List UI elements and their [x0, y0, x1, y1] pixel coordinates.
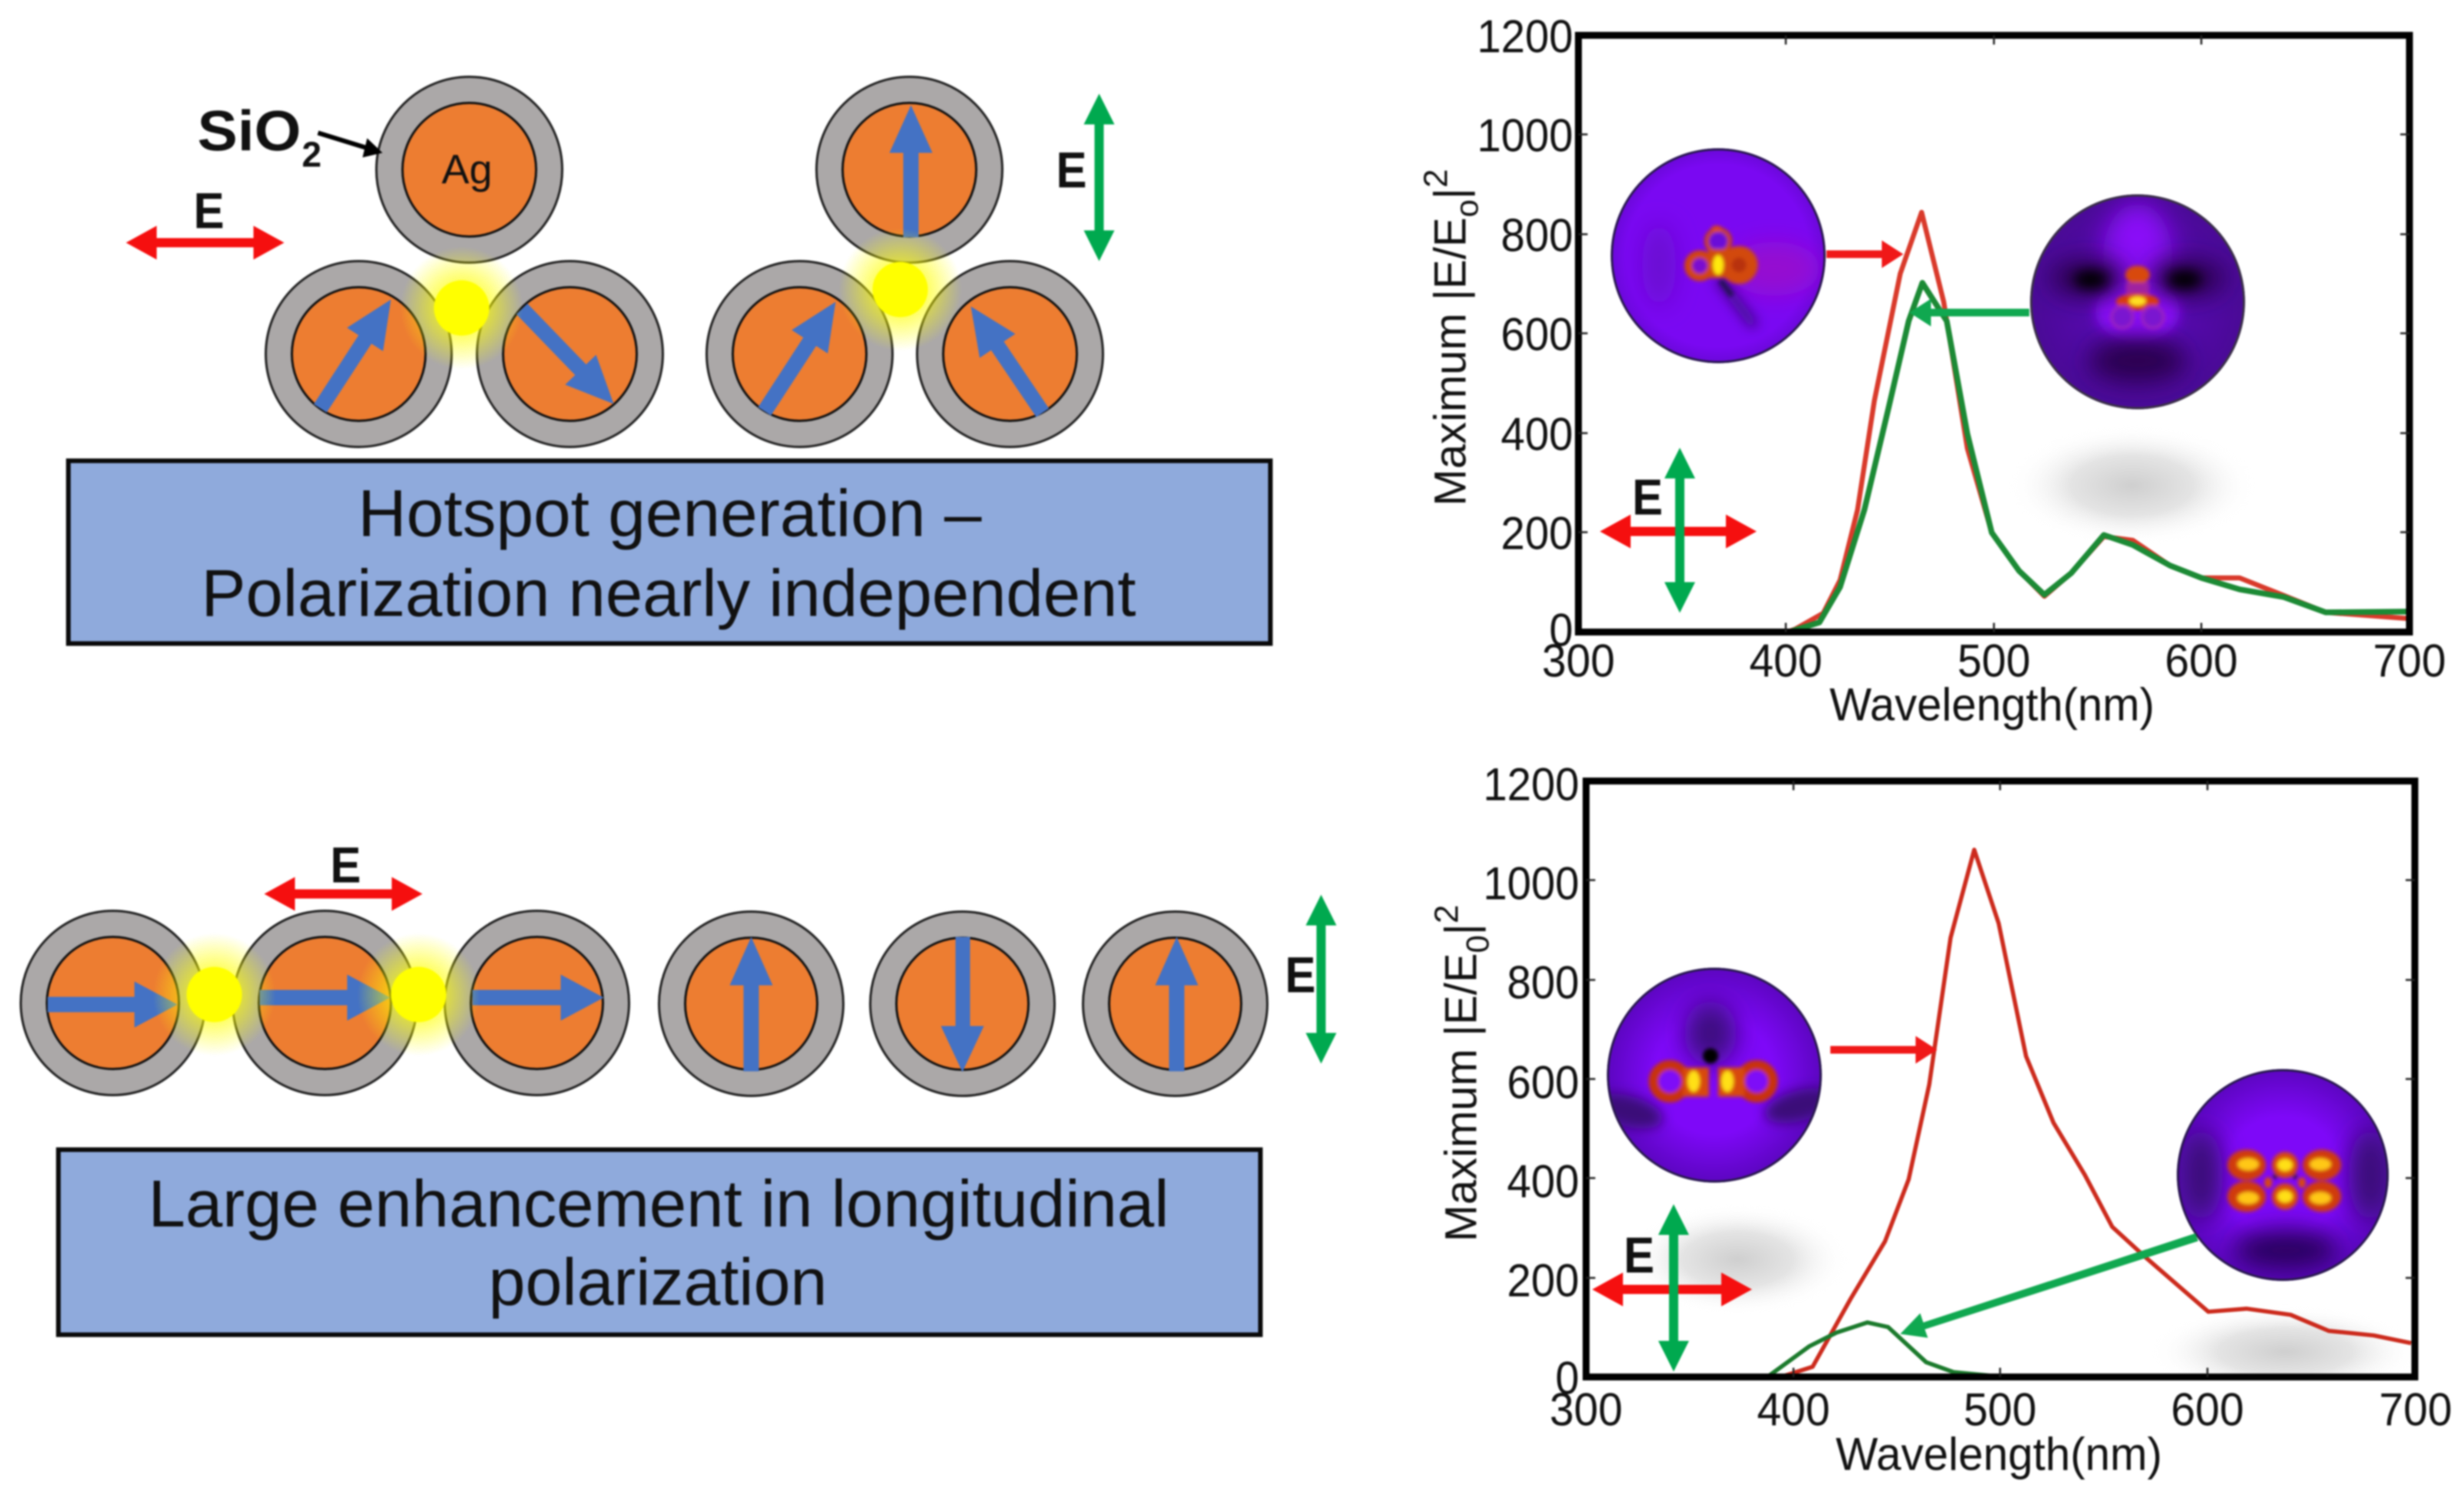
hotspot: glow: [400, 247, 523, 369]
background smudge: [2009, 425, 2255, 545]
x axis title: Wavelength(nm): [1836, 1428, 2162, 1480]
label: E: E: [330, 836, 361, 893]
arrow: green to peak: [1909, 299, 2029, 326]
field map inset: red: [1611, 148, 1826, 363]
label: E red: E: [194, 182, 224, 239]
x tick labels: 700: [2373, 635, 2446, 687]
y tick labels: 1000: [1483, 858, 1579, 909]
background smudge right: [2187, 1318, 2383, 1374]
field map inset: red: [1605, 966, 1823, 1184]
curve: red polarization: [1578, 212, 2408, 632]
label: SiO2: SiO: [197, 99, 301, 163]
y axis title: Maximum |E/E: [1426, 217, 1475, 506]
particle: top with Ag core: [376, 77, 562, 263]
label: SiO2 subscript: 2: [302, 134, 322, 174]
y tick labels: 1000: [1477, 110, 1573, 161]
label: Ag: Ag: [442, 147, 492, 193]
curve: red polarization: [1587, 849, 2411, 1377]
arrow: red field: [1600, 515, 1757, 548]
panel: triangular trimer, vertical polarization: [707, 77, 1114, 447]
particle: bottom left: [266, 261, 452, 447]
particle: right: [1083, 912, 1267, 1096]
arrow: red horizontal field: [126, 226, 284, 260]
caption line 1: Hotspot generation –: [358, 477, 982, 551]
caption box: large enhancement: [58, 1150, 1260, 1335]
field map inset: green: [2030, 194, 2245, 409]
arrow: SiO2 pointer: [318, 133, 383, 157]
y axis title: |: [1436, 924, 1486, 935]
panel: triangular trimer, transverse polarization: [126, 77, 663, 447]
y tick labels: 400: [1507, 1156, 1579, 1207]
hotspot: glow: [839, 228, 962, 351]
arrow: green to curve: [1900, 1233, 2198, 1338]
y axis title: Maximum |E/E: [1436, 953, 1486, 1242]
particle: left: [21, 911, 205, 1095]
field map inset: green: [2177, 1069, 2392, 1281]
label: E: E: [1056, 141, 1087, 198]
particle: right: [445, 911, 629, 1095]
y axis title: 2: [1428, 905, 1465, 924]
panel: linear trimer, transverse polarization: [659, 895, 1336, 1096]
arrow: red field: [1592, 1273, 1752, 1306]
particle: top with dipole arrow: [816, 77, 1002, 263]
y tick labels: 200: [1507, 1255, 1579, 1306]
x tick labels: [1550, 1384, 2452, 1435]
curve: green polarization: [1587, 1322, 2002, 1377]
y tick labels: 1200: [1477, 11, 1573, 62]
y tick labels: [1483, 759, 1579, 1404]
y axis title: 0: [1459, 935, 1495, 953]
hotspot: left gap: [153, 933, 276, 1056]
y axis title: |: [1426, 188, 1475, 200]
y tick labels: 600: [1501, 309, 1573, 360]
y axis title: o: [1449, 200, 1485, 217]
label: E: E: [1285, 946, 1316, 1003]
particle: bottom left: [707, 261, 893, 447]
axes frame: [1586, 781, 2415, 1377]
arrow: green field: [1658, 1204, 1689, 1372]
label: E: E: [1632, 468, 1663, 525]
panel: linear trimer, longitudinal polarization: [21, 836, 629, 1095]
y tick labels: 800: [1507, 957, 1579, 1008]
y tick labels: [1477, 11, 1573, 656]
particle: left: [659, 912, 843, 1096]
particle: middle: [233, 911, 417, 1095]
x tick labels: [1542, 635, 2446, 687]
x tick labels: 300: [1542, 635, 1615, 687]
arrow: green vertical field: [1084, 94, 1114, 261]
x tick labels: 700: [2380, 1384, 2452, 1435]
y tick labels: 400: [1501, 409, 1573, 460]
particle: middle: [870, 912, 1055, 1096]
x tick labels: 400: [1750, 635, 1822, 687]
axis ticks: [1586, 781, 2415, 1377]
curve: green polarization: [1578, 283, 2408, 632]
particle: bottom right: [917, 261, 1103, 447]
x tick labels: 600: [2171, 1384, 2244, 1435]
chart: bottom spectrum: [1428, 759, 2452, 1480]
chart: top spectrum: [1417, 11, 2446, 730]
x tick labels: 600: [2164, 635, 2238, 687]
y tick labels: 600: [1507, 1057, 1579, 1108]
caption line 2: Polarization nearly independent: [201, 557, 1136, 631]
arrow: red horizontal field: [264, 877, 422, 911]
caption line 2: polarization: [488, 1246, 827, 1319]
y axis title: 2: [1417, 169, 1455, 188]
x tick labels: 400: [1757, 1384, 1830, 1435]
x tick labels: 300: [1550, 1384, 1622, 1435]
x tick labels: 500: [1957, 635, 2031, 687]
arrow: green field: [1664, 448, 1695, 613]
y tick labels: 0: [1549, 604, 1573, 656]
arrow: red to peak: [1830, 1036, 1937, 1064]
x tick labels: 500: [1963, 1384, 2037, 1435]
background smudge left: [1626, 1204, 1849, 1315]
axes frame: [1578, 35, 2409, 632]
y tick labels: 200: [1501, 508, 1573, 559]
hotspot: right gap: [357, 933, 480, 1056]
y tick labels: 800: [1501, 210, 1573, 261]
arrow: red to peak: [1826, 240, 1903, 268]
caption line 1: Large enhancement in longitudinal: [148, 1167, 1169, 1241]
label: E: E: [1624, 1226, 1654, 1283]
axis ticks: [1578, 35, 2409, 632]
particle: bottom right: [477, 261, 663, 447]
y tick labels: 1200: [1483, 759, 1579, 810]
y tick labels: 0: [1555, 1352, 1579, 1404]
x axis title: Wavelength(nm): [1830, 679, 2154, 730]
arrow: green vertical field: [1306, 895, 1336, 1064]
caption box: hotspot generation: [68, 461, 1270, 644]
